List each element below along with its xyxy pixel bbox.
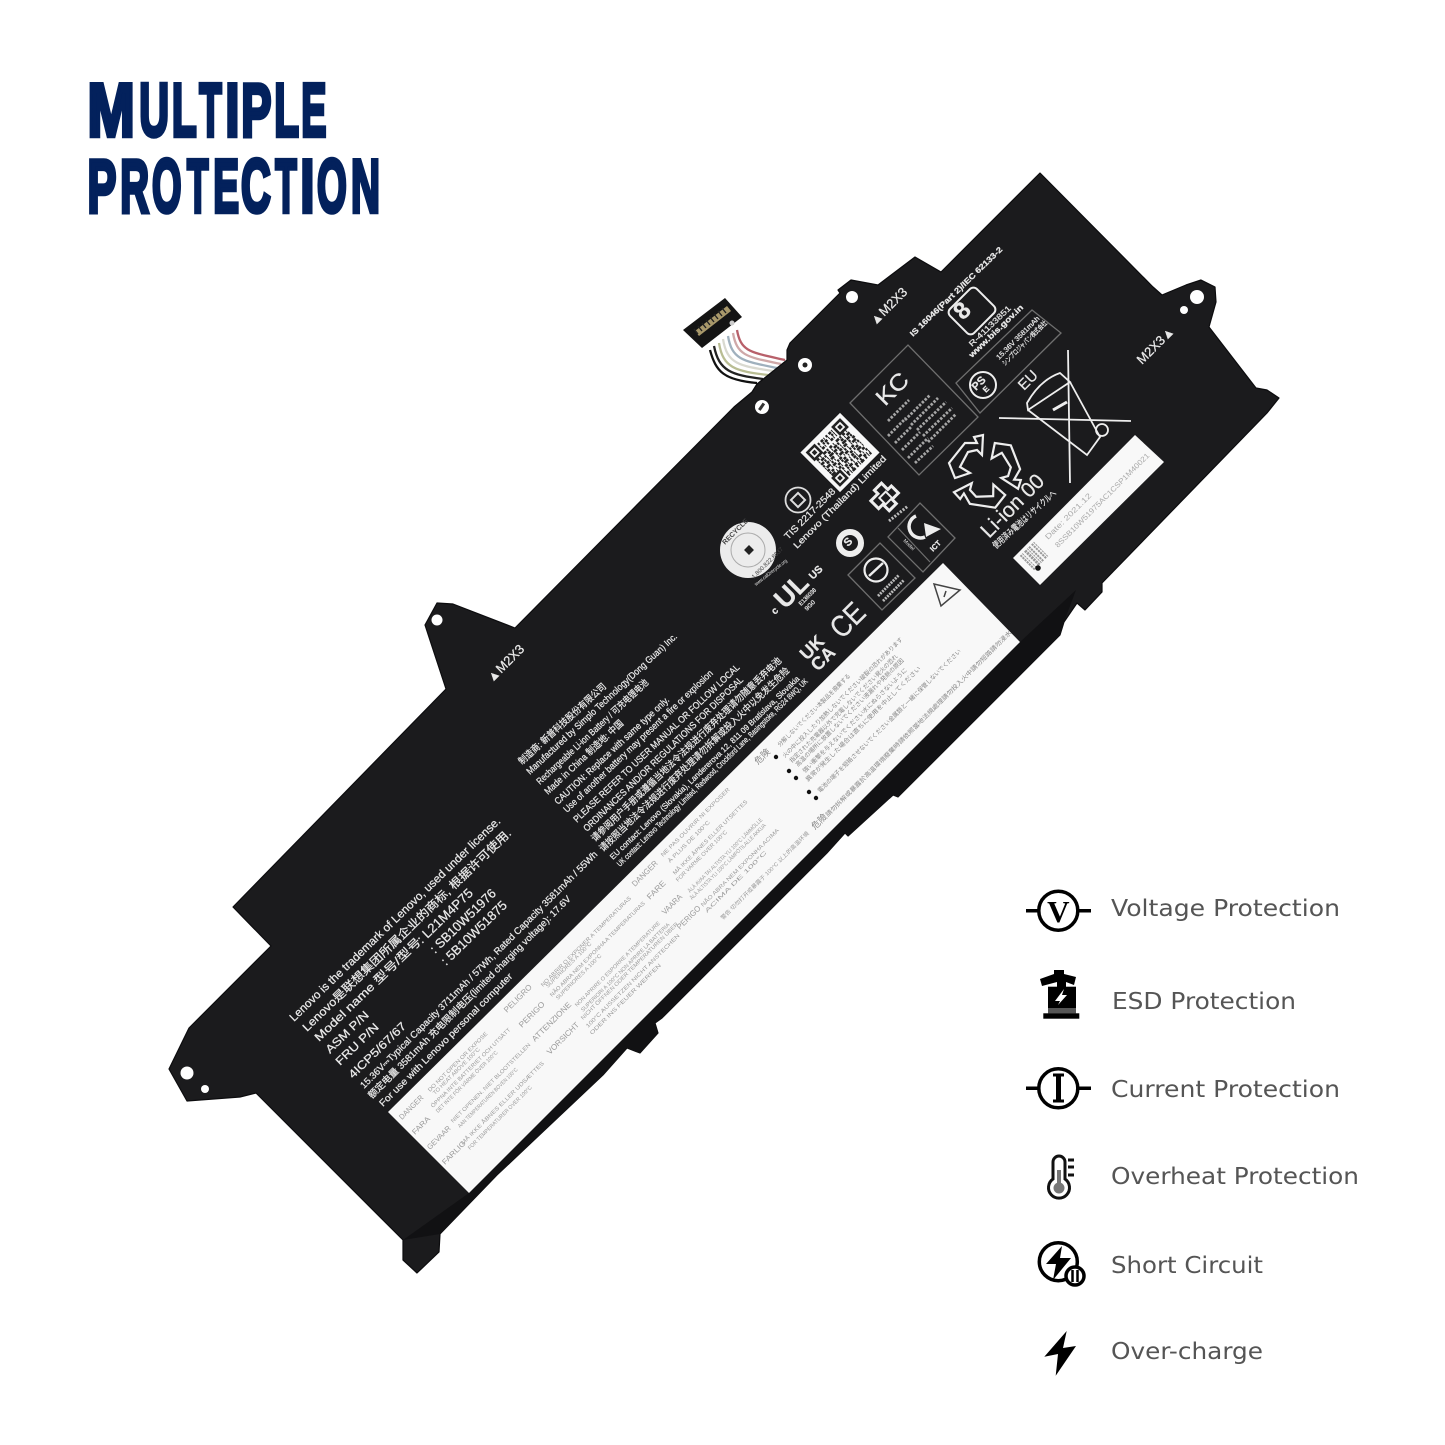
- sticker date text: 8SSB10W51975AC1CSP1M40021: [1053, 451, 1151, 549]
- sticker multilingual warnings: DANGER: [630, 859, 660, 888]
- model information text: Lenovo是联想集团所属企业的商标, 根据许可使用.: [299, 826, 514, 1034]
- UKCA mark: CA: [807, 642, 839, 675]
- title: L: [172, 68, 197, 152]
- sticker Japanese warnings: [752, 629, 1013, 831]
- Li-ion label: Li-ion 00: [976, 470, 1049, 543]
- BIS certification mark: [908, 245, 1025, 360]
- voltage protection item: [1026, 891, 1340, 930]
- sticker Japanese warnings: 請勿拆解或暴露於高溫環境廢棄時請依照當地法規處理請勿投入火中請勿短路請勿浸水: [824, 629, 1013, 818]
- UL mark: E136038: [798, 587, 818, 607]
- S mark: S: [842, 535, 855, 549]
- title: O: [152, 144, 182, 228]
- title: C: [241, 144, 271, 228]
- model information text: 15.36V⎓Typical Capacity 3711mAh / 57Wh, Rated Capacity 3581mAh / 55Wh: [358, 849, 600, 1091]
- Thailand certification text: TIS 2217-2548: [782, 486, 838, 542]
- icon: thermometer: [1048, 1156, 1074, 1198]
- title: R: [120, 144, 149, 228]
- sticker multilingual warnings: ACIMA DE 100°C: [704, 850, 769, 914]
- title: T: [199, 68, 222, 152]
- sticker date text: Date: 2021.12: [1043, 491, 1093, 541]
- Li-ion label: 使用済み電池はリサイクルへ: [990, 487, 1058, 550]
- title: E: [213, 144, 239, 228]
- KC certification box: KC: [870, 367, 914, 411]
- battery: [169, 173, 1279, 1273]
- sticker multilingual warnings: GEVAAR: [425, 1123, 453, 1151]
- BIS certification mark: IS 16046(Part 2)/IEC 62133-2: [908, 245, 1005, 338]
- manufacturer and caution text: 请参阅用户手册或遵循当地法令法规进行废弃处理请勿随意丢弃电池: [589, 655, 784, 844]
- icon: ESD: [1040, 970, 1079, 1019]
- sticker multilingual warnings: 100°C AUSSETZEN NICHT ANSTECHEN: [585, 933, 681, 1029]
- sticker QR code: [1021, 543, 1047, 569]
- S mark: [839, 532, 861, 554]
- sticker Japanese warnings: 火の中に投入したり加熱しないでください破裂の恐れがあります: [781, 636, 905, 759]
- over-charge item: [1044, 1331, 1263, 1376]
- swirl logo: [867, 480, 908, 521]
- sticker multilingual warnings: ÄLÄ AVAA TAI ALTISTA YLI 100°C LÄMMÖLLE: [686, 816, 764, 894]
- BIS certification mark: R-41133851: [967, 303, 1013, 348]
- ICT box: Model: [902, 538, 915, 552]
- PSE certification box: PS: [970, 374, 989, 393]
- UL mark: US: [807, 563, 825, 582]
- CE mark: CE: [824, 596, 872, 645]
- ESD protection item: [1040, 970, 1296, 1019]
- model information text: : 5B10W51875: [438, 898, 510, 968]
- PSE certification box: 15.36V 3581mAh: [995, 315, 1041, 361]
- sticker multilingual warnings: NÃO ABRA NEM EXPONHA A TEMPERATURAS: [548, 900, 647, 998]
- title: T: [187, 144, 208, 228]
- circle certification box: [848, 543, 915, 610]
- sticker Japanese warnings: 危險: [809, 811, 829, 831]
- sticker multilingual warnings: AAN TEMPERATUREN BOVEN 100°C: [457, 1067, 519, 1129]
- sticker multilingual warnings: NICHT ÖFFNEN ODER TEMPERATUREN ÜBER: [579, 921, 680, 1021]
- manufacturer and caution text: [516, 631, 810, 868]
- manufacturer and caution text: 请按照当地法令法规进行废弃处理请勿拆解或投入火中以免发生危险: [597, 665, 792, 854]
- UL mark: c: [769, 605, 781, 617]
- manufacturer and caution text: EU contact: Lenovo (Slovakia), Landererova 12, 811 09 Bratislava, Slovakia: [608, 674, 802, 861]
- ESD protection item: ESD Protection: [1112, 989, 1296, 1015]
- current protection item: Current Protection: [1111, 1077, 1340, 1103]
- voltage protection item: Voltage Protection: [1111, 896, 1340, 922]
- sticker multilingual warnings: MÅ IKKE ÅBNES ELLER UDSÆTTES: [459, 1060, 546, 1146]
- warning sticker: [388, 563, 1020, 1193]
- manufacturer and caution text: Rechargeable Li-ion Battery / 可充电锂电池: [534, 677, 651, 787]
- sticker multilingual warnings: PERIGO: [675, 904, 703, 931]
- title: P: [88, 144, 116, 228]
- model information text: Lenovo is the trademark of Lenovo, used under license.: [288, 815, 503, 1024]
- sticker dot: [1035, 565, 1041, 571]
- current protection item: [1026, 1069, 1340, 1108]
- sticker multilingual warnings: FOR TEMPERATURER OVER 100°C: [467, 1085, 534, 1151]
- sticker multilingual warnings: NO ABRIR O EXPONER A TEMPERATURAS: [540, 896, 633, 988]
- WEEE crossed bin icon: [999, 350, 1131, 483]
- title: P: [241, 68, 271, 152]
- warning triangle: [934, 584, 960, 606]
- manufacturer and caution text: UK contact: Lenovo Technology Limited, Redwood, Crockford Lane, Basingstoke, RG24 8WQ, UK: [615, 677, 810, 868]
- icon: voltage: V: [1047, 894, 1070, 929]
- manufacturer and caution text: 制造商: 新普科技股份有限公司: [516, 681, 609, 767]
- sticker Japanese warnings: 指定された充電器以外で充電しないでください発火の恐れ: [788, 653, 899, 764]
- manufacturer and caution text: PLEASE REFER TO USER MANUAL OR FOLLOW LOCAL: [571, 662, 742, 825]
- title: [88, 68, 380, 228]
- sticker multilingual warnings: VAARA: [660, 892, 685, 916]
- ICT box: [888, 503, 955, 572]
- BIS certification mark: 8: [948, 297, 977, 325]
- sticker Japanese warnings: 高温の場所に放置しないでください液漏れや発熱の原因: [794, 657, 905, 768]
- M2X3 marks: [484, 284, 1177, 685]
- battery connector: [683, 298, 742, 348]
- overheat protection item: [1048, 1156, 1359, 1198]
- BIS certification mark: www.bis.gov.in: [966, 303, 1025, 360]
- manufacturer and caution text: Manufactured by Simplo Technology(Dong Guan) Inc.: [525, 631, 680, 777]
- sticker Japanese warnings: 強い衝撃を与えないでください水にぬらさないように: [801, 666, 909, 774]
- short circuit item: Short Circuit: [1111, 1253, 1263, 1279]
- UL mark: UL: [768, 568, 815, 614]
- ICT box: ICT: [928, 538, 943, 553]
- UL mark: 9G0: [804, 599, 817, 612]
- model information text: Model name 型号/型号: [311, 935, 424, 1044]
- model information text: : L21M4P75: [414, 885, 476, 946]
- sticker multilingual warnings: TO HEAT ABOVE 100°C: [432, 1047, 482, 1096]
- icon: current: [1026, 1069, 1091, 1108]
- over-charge item: Over-charge: [1111, 1339, 1263, 1365]
- sticker Japanese warnings: 危険: [752, 746, 772, 766]
- protection list: [1026, 891, 1359, 1376]
- sticker multilingual warnings: SUPERIORES A 100°C: [555, 953, 603, 1001]
- sticker multilingual warnings: DANGER: [397, 1093, 426, 1121]
- M2X3 marks: M2X3▲: [1134, 323, 1177, 367]
- icon: lightning bolt: [1044, 1331, 1076, 1376]
- sticker multilingual warnings: VORSICHT: [545, 1020, 581, 1056]
- sticker multilingual warnings: NÃO ABRA NEM EXPONHA ACIMA: [699, 827, 781, 908]
- title: I: [300, 144, 314, 228]
- sticker multilingual warnings: FARA: [410, 1114, 432, 1136]
- EU mark: EU: [1015, 367, 1042, 394]
- PSE certification box: シンプロジャパン株式会社: [1000, 319, 1049, 367]
- sticker multilingual warnings: ÖPPNA INTE BATTERIET OCH UTSÄTT: [429, 1026, 513, 1109]
- sticker multilingual warnings: MÅ IKKE ÅPNES ELLER UTSETTES: [671, 798, 750, 876]
- sticker multilingual warnings: PELIGRO: [502, 983, 534, 1014]
- sticker multilingual warnings: SUPERIORI A 100°C NON APRIRE LA BATTERIA: [580, 922, 672, 1013]
- battery cable: [710, 330, 785, 383]
- lower edge shading: [403, 590, 1076, 1240]
- M2X3 marks: ▲M2X3: [867, 284, 910, 328]
- title: O: [317, 144, 347, 228]
- sticker multilingual warnings: 警告 切勿打开或暴露于 100°C 以上的高温环境: [719, 829, 811, 921]
- model information text: ASM P/N: [324, 1009, 372, 1056]
- PSE certification box: [956, 310, 1061, 413]
- UKCA mark: UK: [796, 631, 828, 664]
- recycling symbol: [949, 435, 1035, 522]
- short circuit item: [1039, 1243, 1263, 1285]
- PSE certification box: E: [981, 384, 992, 394]
- RBRC recycle seal: 1.800.822.8837: [751, 546, 785, 580]
- title: L: [274, 68, 299, 152]
- manufacturer and caution text: ORDINANCES AND/OR REGULATIONS FOR DISPOSAL: [581, 675, 746, 834]
- sticker Japanese warnings: 分解しないでください本製品を廃棄する: [776, 672, 852, 748]
- title: N: [351, 144, 380, 228]
- Thailand certification text: Lenovo (Thailand) Limited: [791, 454, 888, 550]
- sticker multilingual warnings: FOR VARME OVER 100°C: [675, 830, 729, 883]
- UKCA mark: [796, 631, 839, 675]
- sticker multilingual warnings: FARE: [645, 879, 668, 901]
- M2X3 marks: ▲M2X3: [484, 641, 527, 685]
- title: U: [139, 68, 169, 152]
- title: T: [275, 144, 297, 228]
- icon: short circuit: [1039, 1243, 1084, 1285]
- RBRC recycle seal: RECYCLE: [721, 518, 750, 546]
- sticker multilingual warnings: NE PAS OUVRIR NI EXPOSER: [660, 787, 732, 858]
- sticker multilingual warnings: DET INTE FÖR VÄRME ÖVER 100°C: [434, 1049, 500, 1114]
- sticker multilingual warnings: NON APRIRE O ESPORRE A TEMPERATURE: [574, 920, 662, 1008]
- model information text: For use with Lenovo personal computer: [377, 971, 515, 1109]
- RBRC recycle seal: [720, 518, 789, 588]
- manufacturer and caution text: Made in China 制造地: 中国: [542, 717, 626, 797]
- sticker multilingual warnings: PERIGO: [517, 1000, 547, 1029]
- sticker multilingual warnings: NIET OPENEN. NIET BLOOTSTELLEN: [450, 1042, 532, 1124]
- battery body: [169, 173, 1279, 1273]
- model information text: : SB10W51976: [427, 886, 499, 956]
- mounting holes: [180, 290, 1204, 1093]
- model information text: FRU P/N: [334, 1021, 382, 1068]
- sticker bullet dots: [774, 755, 818, 800]
- title: M: [88, 68, 135, 152]
- manufacturer and caution text: Use of another battery may present a fire or explosion: [561, 668, 716, 815]
- model information text: 额定电量 3581mAh 充电限制电压(limited charging voltage): 17.6V: [366, 893, 574, 1101]
- overheat protection item: Overheat Protection: [1111, 1164, 1359, 1190]
- main QR code: [800, 413, 880, 492]
- sticker multilingual warnings: ATTENZIONE: [530, 1000, 573, 1043]
- sticker multilingual warnings: À PLUS DE 100°C: [666, 819, 712, 864]
- sticker multilingual warnings: FARLIG: [440, 1139, 468, 1166]
- manufacturer and caution text: CAUTION: Replace with same type only.: [553, 695, 672, 807]
- KC certification box: [850, 345, 978, 475]
- sticker multilingual warnings: ODER INS FEUER WERFEN: [589, 963, 663, 1036]
- icon: voltage: [1026, 891, 1091, 930]
- title: E: [301, 68, 326, 152]
- sticker Japanese warnings: 電池の端子を短絡させないでください金属類と一緒に保管しないでください: [816, 647, 963, 794]
- RBRC recycle seal: www.call2recycle.org: [754, 558, 789, 588]
- Thailand certification text: [782, 454, 888, 550]
- small date sticker: [1013, 435, 1164, 585]
- model information text: [288, 815, 600, 1109]
- sticker multilingual warnings: ÄLÄ ALTISTA YLI 100°C LÄMPÖTILALLE AKKUA: [688, 822, 768, 901]
- sticker multilingual warnings: [397, 787, 811, 1166]
- sticker multilingual warnings: SUPERIORES A 100°C: [545, 941, 593, 989]
- sticker Japanese warnings: 異常が発生した場合は直ちに使用を中止してください: [804, 665, 923, 783]
- title: I: [225, 68, 239, 152]
- sticker multilingual warnings: DO NOT OPEN OR EXPOSE: [427, 1031, 490, 1093]
- model information text: 4ICP5/67/67: [347, 1020, 409, 1081]
